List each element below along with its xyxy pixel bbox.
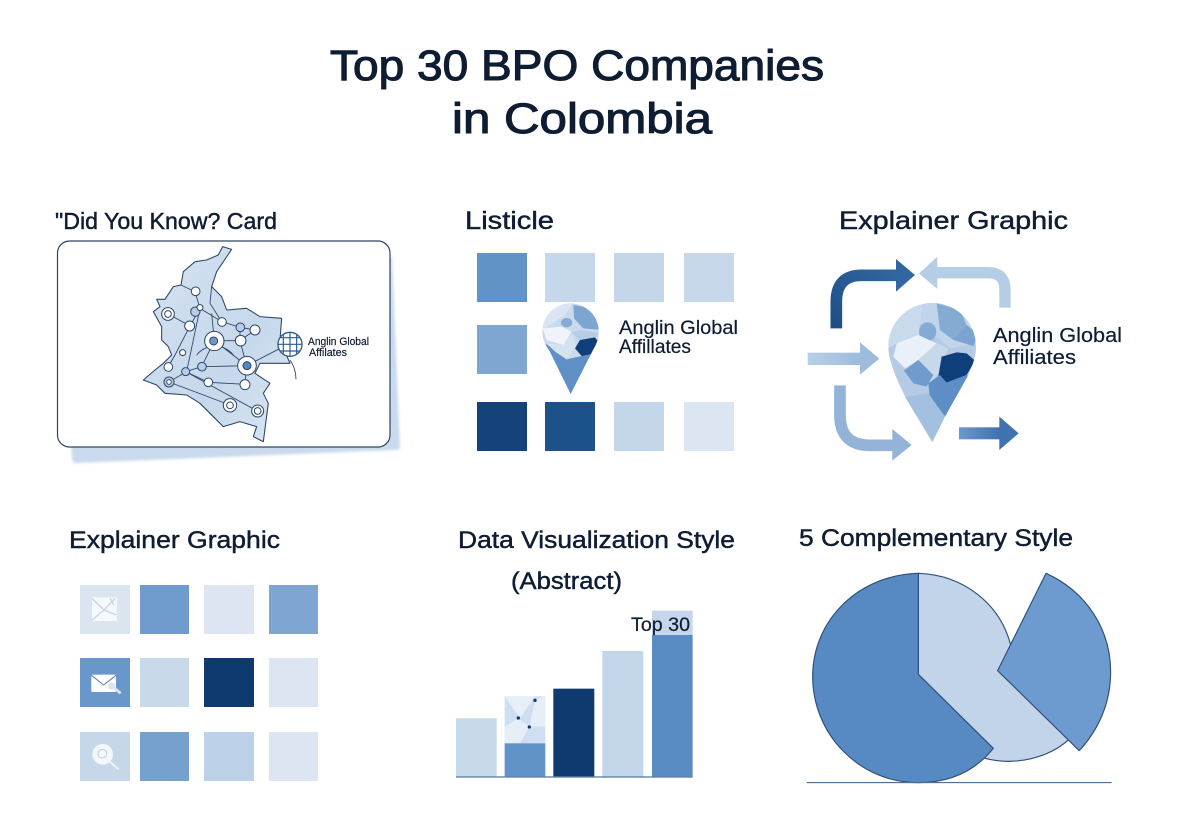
icon: magnifier: [92, 744, 118, 769]
label: Anglin Global Affiliates: Anglin Global: [619, 318, 738, 339]
panel: explainer graphic icon grid: [69, 527, 318, 781]
bar chart: [456, 611, 693, 778]
card frame: [58, 241, 390, 447]
panel: explainer graphic arrows: [808, 207, 1122, 461]
heading: explainer graphic: Explainer Graphic: [839, 207, 1068, 235]
icon: globe: [278, 332, 302, 356]
panel: data visualization: [456, 527, 735, 778]
arrow: left in: [808, 342, 879, 375]
icon: map pin: [888, 303, 976, 442]
label: Anglin Global Affiliates: Anglin Global: [308, 336, 369, 348]
label: Anglin Global Affiliates: Affillates: [619, 337, 691, 358]
label: Anglin Global Affiliates: [993, 325, 1122, 369]
card shadow: [71, 257, 400, 463]
label: Anglin Global Affiliates: Affiliates: [993, 347, 1076, 369]
heading: listicle: Listicle: [465, 207, 554, 235]
square grid: [477, 253, 734, 451]
square grid: [80, 585, 318, 781]
heading: did you know card: "Did You Know? Card: [55, 208, 277, 234]
label: Anglin Global Affiliates: Anglin Global: [993, 325, 1122, 347]
heading: abstract: (Abstract): [511, 568, 622, 595]
patterned bar: [505, 696, 545, 777]
arrow: right out: [959, 417, 1019, 450]
arrow: light top right: [919, 257, 1005, 308]
label: Anglin Global Affiliates: [308, 336, 369, 359]
title: [330, 42, 824, 143]
panel: listicle: [465, 207, 738, 451]
arrow: bottom left: [840, 385, 912, 461]
icon: map pin: [542, 304, 599, 394]
icon: envelope with magnifier: [91, 675, 121, 693]
title: Top 30 BPO Companies: [330, 42, 824, 90]
heading: explainer graphic: Explainer Graphic: [69, 527, 280, 554]
label: top 30: Top 30: [631, 615, 690, 636]
panel: did you know card: [55, 208, 400, 463]
network nodes: [162, 287, 264, 417]
panel: pie chart: [799, 525, 1112, 783]
heading: 5 complementary style: 5 Complementary Style: [799, 525, 1073, 552]
icon: broken envelope: [92, 597, 117, 621]
label: Anglin Global Affiliates: [619, 318, 738, 358]
label: Anglin Global Affiliates: Affilates: [309, 347, 347, 359]
arrow: dark top left: [836, 259, 915, 328]
title: in Colombia: [452, 95, 712, 143]
heading: data visualization style: Data Visualization Style: [458, 527, 735, 554]
pie chart: [807, 573, 1112, 783]
map of Colombia with network nodes: [143, 247, 302, 442]
